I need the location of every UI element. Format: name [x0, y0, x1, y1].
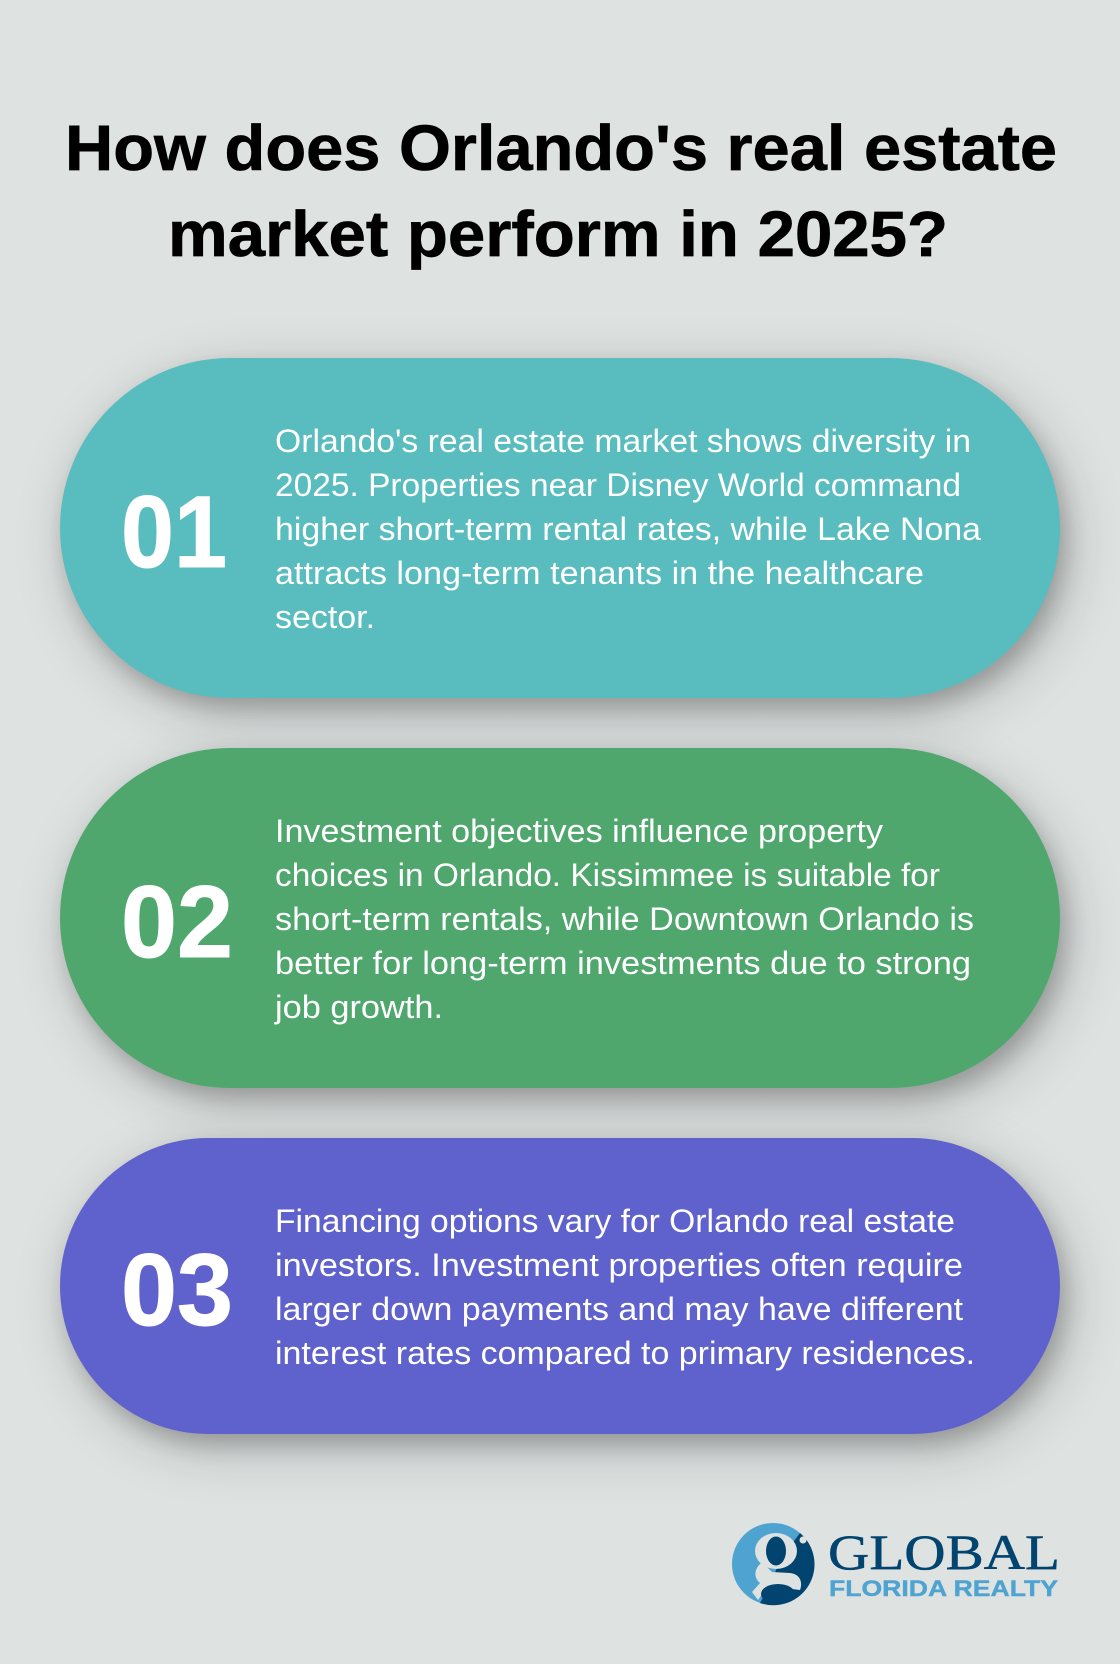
step number 03: 03: [121, 1233, 233, 1347]
title: market perform in 2025?: [168, 198, 948, 270]
step number 02: 02: [121, 865, 233, 979]
logo wordmark: FLORIDA REALTY: FLORIDA REALTY: [829, 1576, 1058, 1601]
panel: step 01: [60, 358, 1060, 698]
logo: Global Florida Realty: [732, 1523, 1060, 1606]
text block: step 02 description: [274, 813, 974, 1025]
text block: step 02 description: short-term rentals, while Downtown Orlando is: [275, 901, 974, 937]
text block: step 01 description: sector.: [275, 599, 375, 635]
text block: step 03 description: larger down payments and may have different: [275, 1291, 963, 1327]
text block: step 02 description: Investment objectives influence property: [275, 813, 883, 849]
text block: step 02 description: better for long-term investments due to strong: [275, 945, 971, 981]
text block: step 03 description: Financing options vary for Orlando real estate: [275, 1203, 955, 1239]
icon: g monogram: [732, 1523, 815, 1605]
text block: step 03 description: [275, 1203, 975, 1371]
logo wordmark: GLOBAL: GLOBAL: [828, 1524, 1060, 1580]
panel: step 02: [60, 748, 1060, 1088]
text block: step 01 description: [275, 423, 981, 635]
text block: step 01 description: Orlando's real estate market shows diversity in: [275, 423, 971, 459]
text block: step 03 description: investors. Investment properties often require: [275, 1247, 963, 1283]
text block: step 01 description: higher short-term rental rates, while Lake Nona: [275, 511, 981, 547]
text block: step 03 description: interest rates compared to primary residences.: [275, 1335, 975, 1371]
panel: step 03: [60, 1138, 1060, 1434]
text block: step 02 description: choices in Orlando. Kissimmee is suitable for: [275, 857, 940, 893]
title: How does Orlando's real estate: [65, 112, 1057, 184]
text block: step 02 description: job growth.: [274, 989, 443, 1025]
text block: step 01 description: attracts long-term tenants in the healthcare: [275, 555, 924, 591]
title: [65, 112, 1057, 270]
text block: step 01 description: 2025. Properties near Disney World command: [275, 467, 961, 503]
step number 01: 01: [121, 475, 227, 589]
